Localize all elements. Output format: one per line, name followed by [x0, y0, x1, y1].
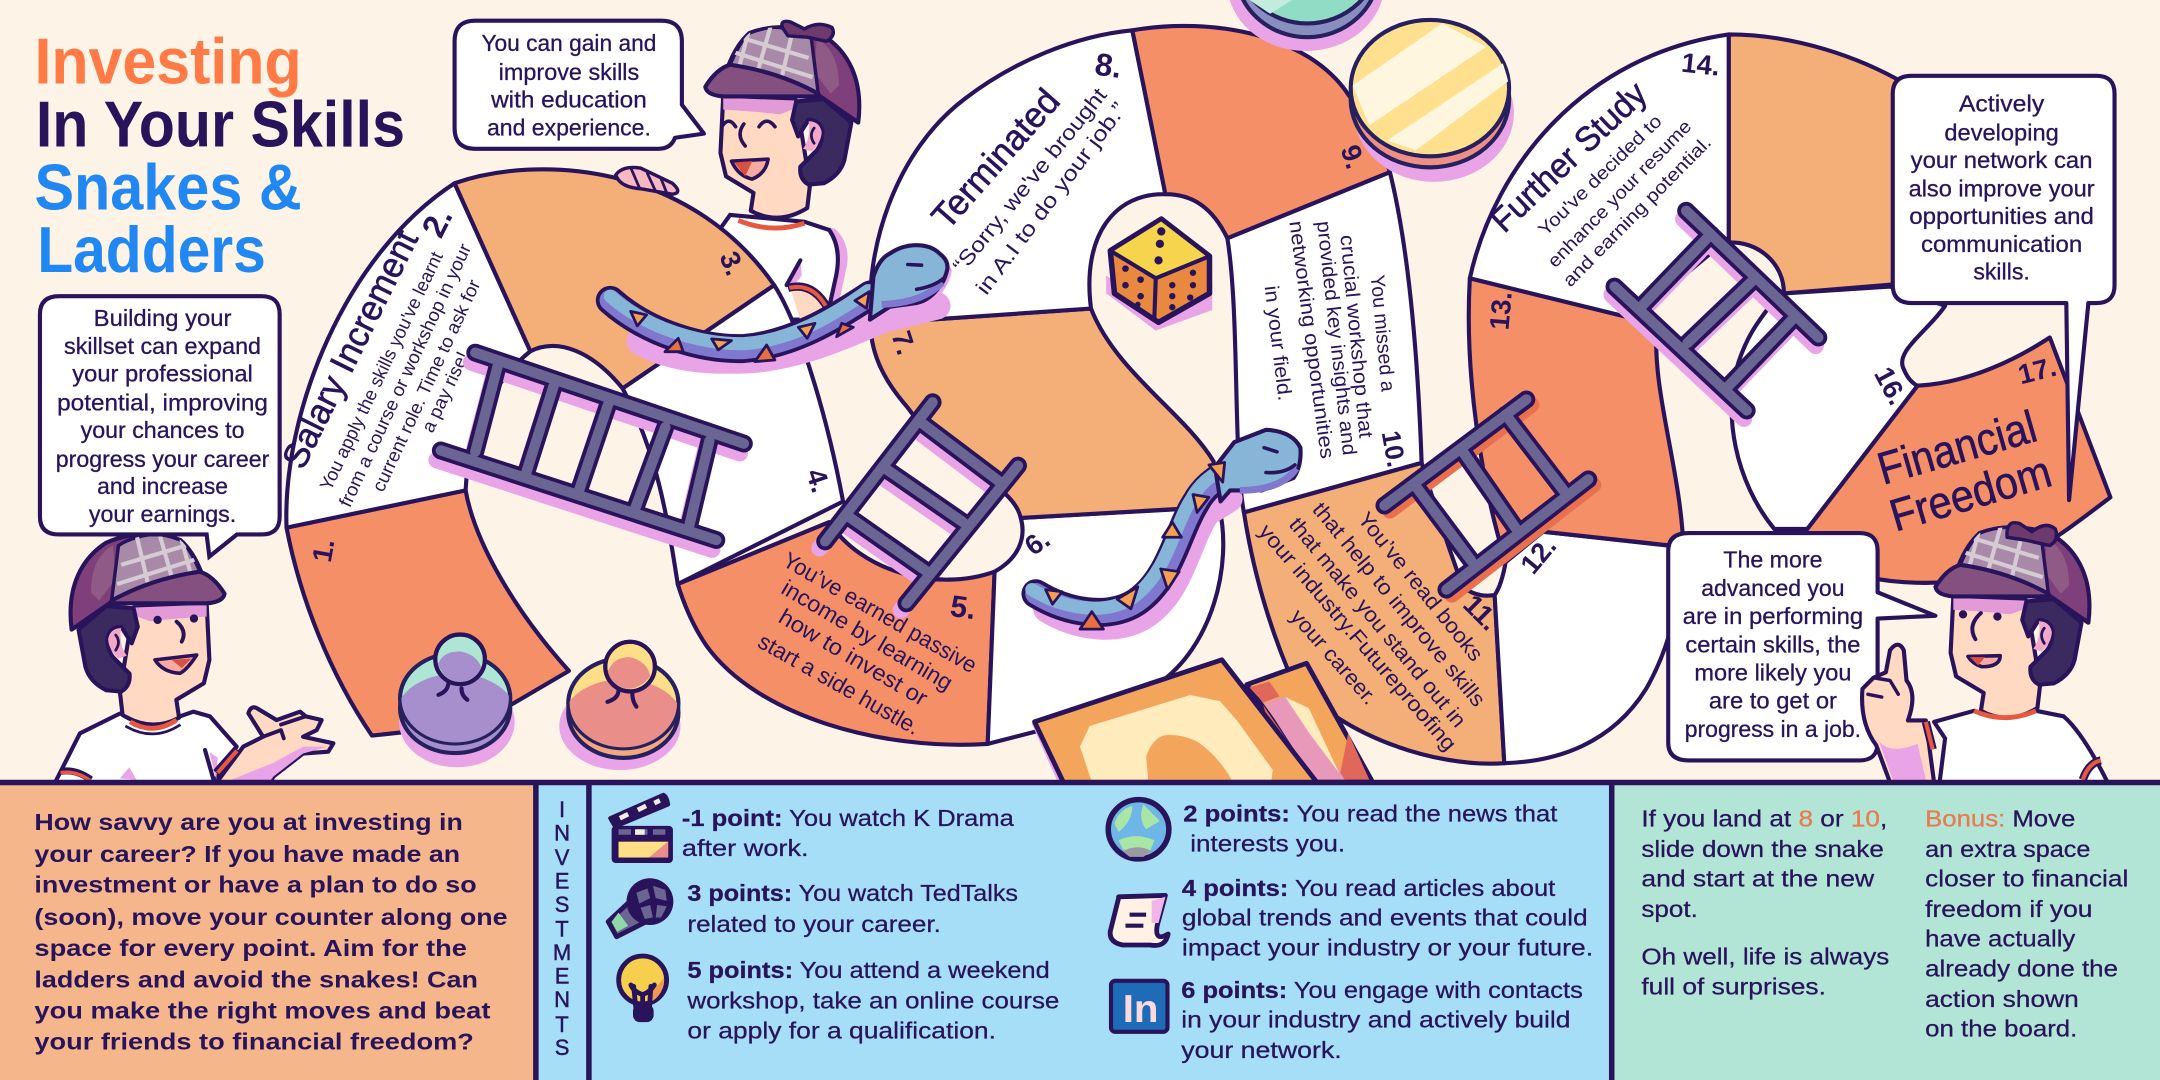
tile text: salary increment: Salary Increment — [274, 224, 426, 475]
panel: how savvy intro: How savvy are you at investing in — [34, 809, 463, 835]
bubble: actively developing network — [1893, 76, 2115, 500]
text: minus one point: after work. — [682, 835, 809, 861]
bubble: building your skillset: your chances to — [81, 417, 245, 443]
text: four points: global trends and events that could — [1182, 905, 1588, 931]
icon: globe — [1108, 800, 1169, 859]
heading: investments vertical: M — [553, 940, 571, 965]
text: minus one point — [682, 805, 1014, 861]
panel: how savvy intro: your career? If you have made an — [34, 841, 460, 867]
tile text: passive income — [754, 547, 982, 740]
text: four points: 4 points: You read articles about — [1182, 875, 1556, 901]
tile text: terminated: in A.I to do your job.” — [971, 98, 1131, 299]
title: Investing — [34, 24, 302, 97]
bubble: actively developing network: opportunities and — [1909, 203, 2094, 229]
game board — [286, 26, 2110, 764]
text: three points: 3 points: You watch TedTalks — [687, 880, 1018, 906]
tile 15 — [1729, 34, 1915, 293]
tile numbers: 6. — [1019, 523, 1055, 561]
title — [34, 24, 405, 286]
tile numbers: 8. — [1093, 46, 1124, 85]
tile numbers: 7. — [886, 327, 922, 358]
heading: investments vertical: T — [555, 917, 569, 942]
bubble: more advanced: progress in a job. — [1685, 716, 1861, 742]
text: six points: in your industry and actively build — [1181, 1007, 1570, 1033]
ladder: 11 to 13 — [1384, 399, 1594, 595]
tile 17 — [1791, 338, 2110, 583]
bubble: more advanced: more likely you — [1694, 660, 1851, 686]
bubble: actively developing network: also improve your — [1909, 175, 2095, 201]
tile 12 — [1495, 532, 1681, 763]
tile text: financial freedom: Financial — [1872, 401, 2042, 495]
character: left presenter — [55, 530, 333, 782]
heading: investments vertical: N — [554, 987, 570, 1012]
text: four points: impact your industry or your future. — [1182, 934, 1593, 960]
bubble: more advanced: advanced you — [1701, 575, 1845, 601]
text: land on snake: Oh well, life is always — [1641, 943, 1889, 969]
tile 4 — [623, 285, 843, 584]
tile numbers: 12. — [1514, 530, 1562, 580]
tile 16 — [1732, 287, 1945, 529]
tile text: read books: your industry.Futureproofing — [1254, 519, 1461, 756]
tile text: read books — [1254, 498, 1490, 756]
card: back card — [1247, 663, 1372, 781]
character: right presenter — [1862, 523, 2108, 782]
text: five points — [686, 957, 1059, 1044]
bubble: building your skillset: your earnings. — [89, 501, 236, 527]
tile text: passive income: how to invest or — [774, 603, 933, 711]
heading: investments vertical: N — [554, 820, 570, 845]
bubble: more advanced: are in performing — [1683, 603, 1863, 629]
heading: investments vertical: I — [559, 797, 565, 822]
bubble: more advanced: The more — [1723, 547, 1823, 573]
tile numbers: 13. — [1484, 290, 1518, 331]
text: six points — [1181, 977, 1583, 1063]
tile text: further study — [1484, 74, 1715, 291]
panel: how savvy intro: your friends to financial freedom? — [34, 1029, 474, 1055]
text: five points: or apply for a qualification. — [687, 1018, 996, 1044]
text: two points: 2 points: You read the news that — [1183, 801, 1558, 827]
tile numbers: 9. — [1335, 141, 1371, 172]
text: bonus: closer to financial — [1925, 866, 2128, 892]
tile 7 — [871, 309, 1214, 518]
text: five points: 5 points: You attend a weekend — [687, 957, 1050, 983]
token: purple pawn — [395, 634, 517, 767]
bubble: actively developing network: communication — [1921, 231, 2082, 257]
tile 6 — [988, 507, 1223, 744]
snake: 8 to 3 — [610, 245, 952, 362]
heading: investments vertical: S — [555, 1035, 569, 1060]
tile text: missed workshop: You missed a — [1366, 274, 1399, 393]
panel: surprises and bonus — [1612, 782, 2160, 1080]
text: bonus: an extra space — [1925, 836, 2090, 862]
tile text: missed workshop: networking opportunities — [1284, 220, 1338, 460]
text: bonus: Bonus: Move — [1925, 806, 2075, 832]
text: six points: 6 points: You engage with contacts — [1181, 977, 1583, 1003]
tile text: financial freedom — [1872, 401, 2057, 541]
tile 5 — [678, 522, 995, 745]
tile text: further study: enhance your resume — [1543, 116, 1695, 271]
tile text: salary increment: You apply the skills you've learnt — [315, 247, 447, 494]
text: bonus: action shown — [1925, 986, 2079, 1012]
text: land on snake: spot. — [1641, 896, 1698, 922]
tile text: passive income: You’ve earned passive — [779, 547, 982, 678]
tile text: terminated: “Sorry, we've brought — [948, 83, 1112, 277]
text: three points — [687, 880, 1018, 937]
tile 10 — [1227, 172, 1422, 512]
bubble: actively developing network: Actively — [1959, 91, 2045, 117]
ladder: 4 to 7 — [820, 402, 1018, 610]
bubble: building your skillset — [40, 296, 280, 557]
token: orange pawn — [559, 642, 683, 770]
tile text: read books: your career. — [1286, 605, 1382, 709]
text: three points: related to your career. — [687, 911, 941, 937]
bubble: building your skillset: your professional — [72, 361, 253, 387]
tile numbers: 10. — [1376, 428, 1412, 469]
bubble: actively developing network: your network can — [1911, 147, 2092, 173]
panel: how savvy intro: (soon), move your counter along one — [34, 904, 508, 930]
panel: investments list — [536, 782, 1612, 1080]
title: Ladders — [37, 213, 266, 286]
text: land on snake: If you land at 8 or 10, — [1641, 806, 1887, 832]
text: land on snake: slide down the snake — [1641, 836, 1884, 862]
token: yellow coin — [1351, 20, 1514, 182]
tile numbers: 1. — [306, 536, 341, 564]
text: bonus: freedom if you — [1925, 896, 2093, 922]
text: land on snake: and start at the new — [1641, 866, 1875, 892]
tile text: financial freedom: Freedom — [1884, 446, 2057, 541]
heading: investments vertical: S — [555, 892, 569, 917]
bubble: gain and improve skills — [455, 21, 704, 149]
tile numbers: 4. — [800, 465, 837, 496]
bubble: gain and improve skills: and experience. — [487, 115, 651, 141]
tile numbers: 2. — [415, 202, 460, 243]
icon: scroll — [1110, 895, 1168, 945]
bubble: gain and improve skills: You can gain and — [481, 30, 656, 56]
tile text: salary increment: from a course or workshop in your — [334, 240, 475, 510]
tile text: terminated — [924, 81, 1131, 299]
tile numbers: 11. — [1457, 588, 1505, 636]
icon: dice — [1106, 219, 1212, 331]
tile numbers: 14. — [1680, 47, 1721, 82]
tile text: read books: You’ve read books — [1353, 507, 1488, 666]
tile text: read books: that help to improve skills — [1308, 498, 1490, 711]
snake: 10 to 6 — [1032, 430, 1301, 629]
text: land on snake: full of surprises. — [1641, 974, 1826, 1000]
text: bonus — [1925, 806, 2128, 1042]
tile text: salary increment: current role. Time to ask for — [368, 276, 484, 495]
tile text: terminated: Terminated — [924, 81, 1068, 237]
title: In Your Skills — [36, 88, 405, 161]
panel: how savvy intro — [0, 782, 536, 1080]
heading: investments vertical: E — [555, 869, 569, 894]
bubble: building your skillset: potential, improving — [57, 390, 268, 416]
text: two points — [1183, 801, 1558, 856]
character: teaching presenter body behind board — [716, 215, 848, 325]
bubble: gain and improve skills: improve skills — [499, 59, 639, 85]
bubble: building your skillset: progress your career — [56, 446, 270, 472]
tile numbers: 3. — [714, 247, 751, 280]
panel: how savvy intro: space for every point. Aim for the — [34, 935, 467, 961]
heading: investments vertical: E — [555, 964, 569, 989]
tile 9 — [1132, 26, 1390, 238]
text: minus one point: -1 point: You watch K Drama — [682, 805, 1014, 831]
tile text: salary increment: a pay rise! — [417, 348, 473, 436]
icon: light bulb — [619, 956, 667, 1022]
tile 2 — [286, 183, 530, 528]
text: two points: interests you. — [1190, 830, 1345, 856]
tile 14 — [1470, 34, 1729, 318]
tile 8 — [870, 30, 1165, 324]
bubble: more advanced — [1668, 533, 1935, 760]
panel: how savvy intro: ladders and avoid the snakes! Can — [34, 967, 478, 993]
title: Snakes & — [34, 150, 302, 223]
tile text: missed workshop: in your field. — [1260, 284, 1296, 402]
text: four points — [1182, 875, 1593, 960]
text: bonus: on the board. — [1925, 1016, 2077, 1042]
panel: how savvy intro: you make the right moves and beat — [34, 997, 491, 1023]
tile text: further study: and earning potential. — [1558, 132, 1715, 291]
bubble: building your skillset: Building your — [94, 305, 232, 331]
tile text: further study: Further Study — [1484, 74, 1655, 240]
bubble: gain and improve skills: with education — [490, 86, 647, 112]
tile text: missed workshop — [1260, 220, 1399, 460]
heading: investments vertical: V — [555, 845, 570, 870]
bubble: actively developing network: skills. — [1973, 259, 2030, 285]
tile text: missed workshop: provided key insights and — [1312, 220, 1360, 456]
text: land on snake — [1641, 806, 1889, 1000]
tile 11 — [1244, 463, 1504, 764]
card: front card — [1035, 660, 1317, 782]
icon: microphone — [608, 878, 673, 937]
bubble: more advanced: certain skills, the — [1685, 631, 1860, 657]
tile text: further study: You've decided to — [1534, 110, 1666, 240]
panel: how savvy intro: investment or have a plan to do so — [34, 872, 477, 898]
tile numbers: 5. — [948, 590, 978, 626]
cards — [1032, 660, 1372, 782]
tile text: read books: that make you stand out in — [1284, 513, 1471, 732]
tile numbers: 17. — [2015, 351, 2059, 390]
bubble: more advanced: are to get or — [1709, 688, 1837, 714]
tile 1 — [287, 490, 569, 736]
icon: linkedin — [1111, 981, 1167, 1032]
ladder: 13 to 15 — [1612, 211, 1818, 419]
character: top presenter head and hand — [616, 21, 859, 218]
ladder: 2 to 4 — [437, 353, 744, 550]
tile 3 — [455, 169, 774, 388]
bubble: building your skillset: skillset can expand — [64, 333, 261, 359]
icon: linkedin: In — [1123, 988, 1159, 1031]
text: bonus: already done the — [1925, 956, 2118, 982]
icon: clapperboard — [610, 795, 672, 862]
token: teal coin — [1227, 0, 1384, 51]
text: five points: workshop, take an online course — [686, 987, 1059, 1013]
bubble: actively developing network: developing — [1944, 120, 2059, 146]
tile text: salary increment — [274, 224, 484, 510]
heading: investments vertical — [553, 797, 571, 1060]
heading: investments vertical: T — [555, 1012, 569, 1037]
tile text: passive income: start a side hustle. — [754, 628, 925, 740]
bubble: building your skillset: and increase — [97, 473, 228, 499]
tile numbers — [306, 46, 2059, 636]
tile text: missed workshop: crucial workshop that — [1335, 234, 1377, 439]
tile numbers: 16. — [1868, 362, 1914, 410]
tile 13 — [1469, 278, 1683, 562]
tile text: passive income: income by learning — [777, 574, 958, 696]
text: six points: your network. — [1181, 1037, 1342, 1063]
text: bonus: have actually — [1925, 925, 2076, 951]
